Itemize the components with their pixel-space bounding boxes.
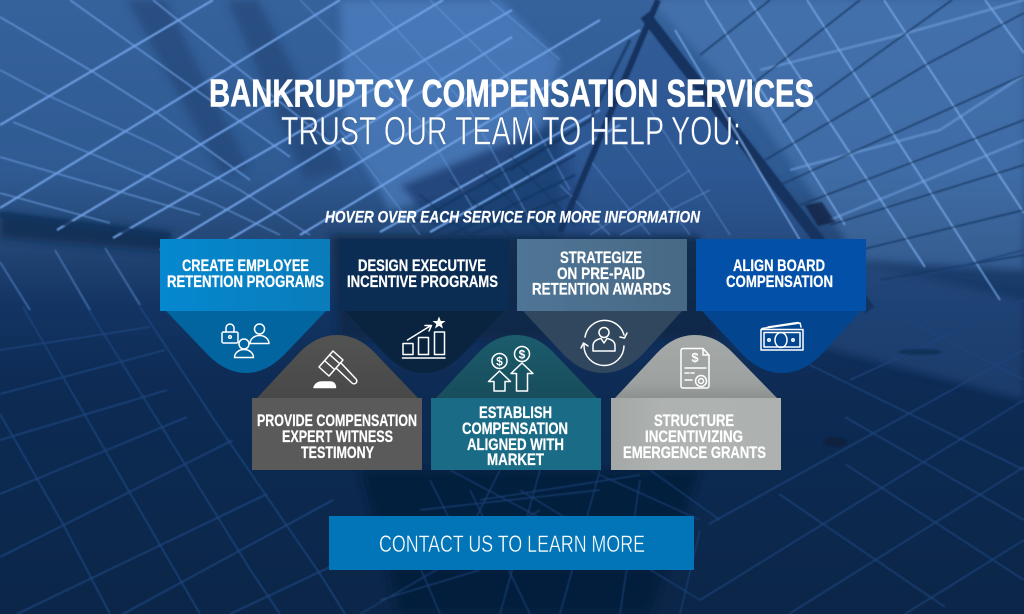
icon: stack of banknotes bbox=[761, 322, 803, 350]
icon: rising bar chart with star bbox=[402, 316, 446, 358]
icon: dollar coins and up arrows: $ bbox=[519, 348, 526, 362]
upper-right lines bbox=[675, 0, 1024, 300]
button: contact us bbox=[329, 516, 694, 570]
panel: create employee retention programs bbox=[160, 239, 330, 373]
panel: create employee retention programs: CREATE EMPLOYEE bbox=[182, 257, 309, 275]
title: TRUST OUR TEAM TO HELP YOU: bbox=[281, 110, 741, 154]
button: contact us: CONTACT US TO LEARN MORE bbox=[379, 531, 645, 558]
panel: strategize on pre-paid retention awards: RETENTION AWARDS bbox=[532, 280, 671, 298]
panel: structure incentivizing emergence grants bbox=[611, 335, 781, 470]
dark beams bbox=[0, 0, 870, 310]
panel: establish compensation aligned with market: MARKET bbox=[487, 451, 544, 469]
panel: design executive incentive programs: DESIGN EXECUTIVE bbox=[358, 257, 486, 275]
panel: align board compensation: ALIGN BOARD bbox=[733, 257, 825, 275]
panel: provide compensation expert witness testimony: PROVIDE COMPENSATION bbox=[257, 412, 417, 430]
panel: provide compensation expert witness testimony: EXPERT WITNESS bbox=[282, 428, 393, 446]
panel: establish compensation aligned with market: ESTABLISH bbox=[479, 404, 552, 422]
panel: strategize on pre-paid retention awards bbox=[517, 239, 687, 373]
icon: person in cycle arrows bbox=[581, 320, 627, 366]
center-lower dense grid bbox=[360, 470, 720, 614]
panel: align board compensation bbox=[696, 239, 866, 373]
dark spots bbox=[805, 202, 942, 447]
lower-left grid bbox=[0, 307, 345, 614]
icon: contract document with seal: $ bbox=[691, 350, 699, 365]
title: BANKRUPTCY COMPENSATION SERVICES bbox=[209, 72, 814, 116]
panel: create employee retention programs: RETENTION PROGRAMS bbox=[167, 273, 324, 291]
icon: gavel bbox=[314, 351, 357, 388]
left-mid bright verticals bbox=[0, 248, 140, 310]
title bbox=[209, 72, 814, 154]
panel: provide compensation expert witness testimony bbox=[252, 335, 422, 470]
panel: establish compensation aligned with market bbox=[431, 335, 601, 470]
lower-right grid bbox=[700, 250, 1024, 614]
panel: strategize on pre-paid retention awards: ON PRE-PAID bbox=[557, 265, 645, 283]
panel: design executive incentive programs: INCENTIVE PROGRAMS bbox=[347, 273, 498, 291]
icon: dollar coins and up arrows bbox=[488, 346, 533, 391]
icon: lock and people bbox=[222, 324, 269, 358]
panel: align board compensation: COMPENSATION bbox=[726, 273, 833, 291]
panel: design executive incentive programs bbox=[339, 239, 509, 373]
bright upper-left lines bbox=[0, 0, 730, 250]
panel: provide compensation expert witness testimony: TESTIMONY bbox=[301, 444, 374, 462]
icon: dollar coins and up arrows: $ bbox=[496, 354, 503, 368]
instruction text: HOVER OVER EACH SERVICE FOR MORE INFORMATION bbox=[325, 208, 701, 226]
panel: structure incentivizing emergence grants: INCENTIVIZING bbox=[645, 428, 743, 446]
panel: structure incentivizing emergence grants: EMERGENCE GRANTS bbox=[623, 444, 766, 462]
panel: establish compensation aligned with market: COMPENSATION bbox=[462, 420, 568, 438]
panel: establish compensation aligned with market: ALIGNED WITH bbox=[467, 436, 564, 454]
panel: structure incentivizing emergence grants: STRUCTURE bbox=[654, 412, 734, 430]
panel: strategize on pre-paid retention awards: STRATEGIZE bbox=[560, 249, 642, 267]
icon: contract document with seal bbox=[681, 348, 709, 388]
